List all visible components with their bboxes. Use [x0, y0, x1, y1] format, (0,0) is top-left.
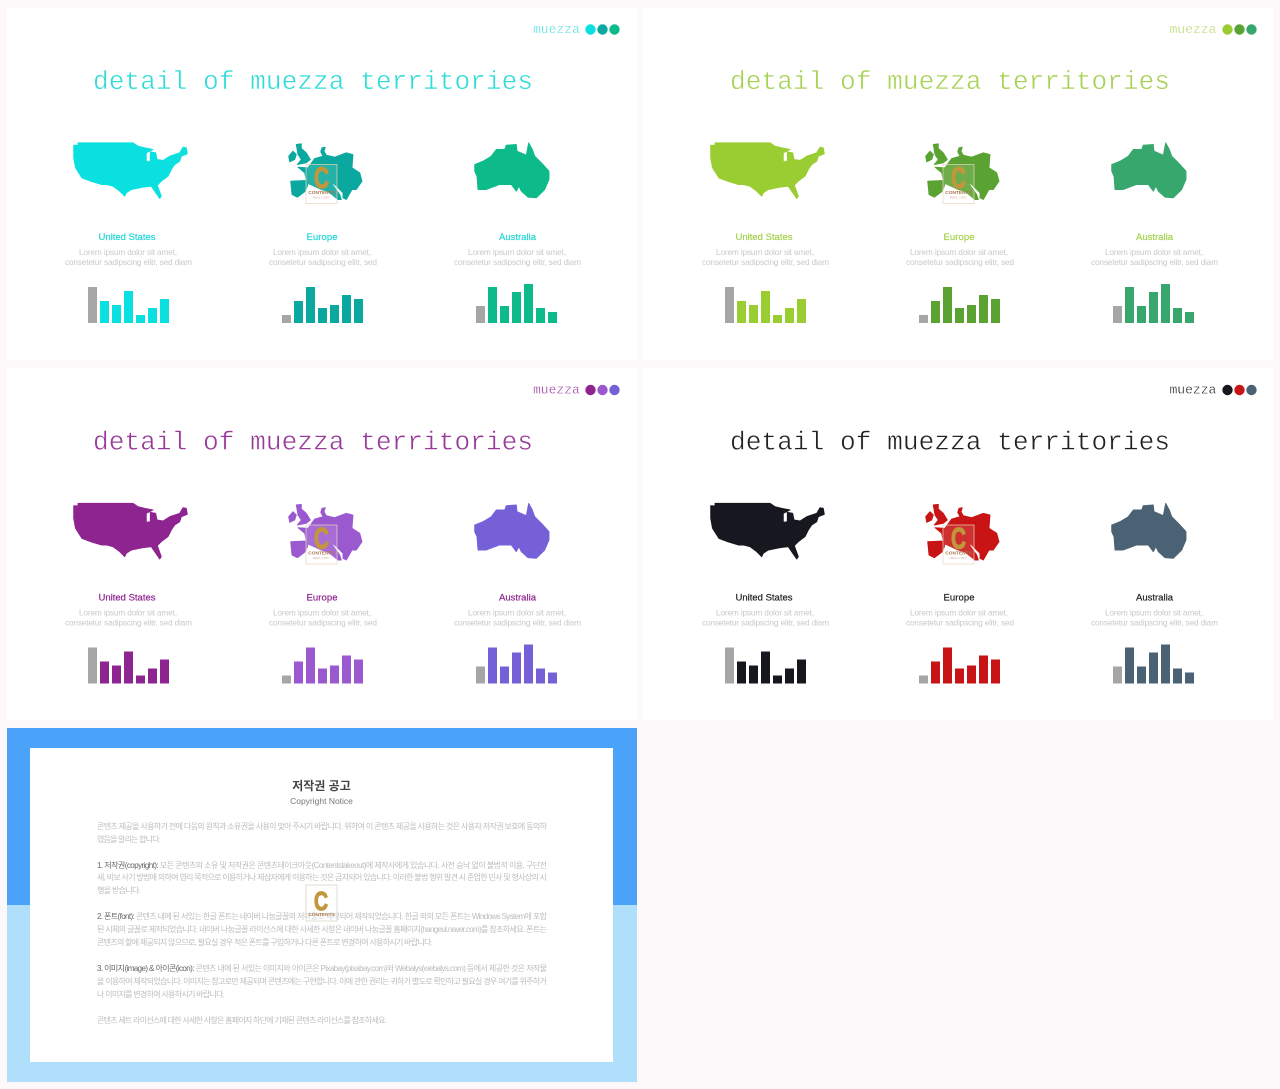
- labels and text: Australia: [1091, 232, 1218, 267]
- map: United States: [74, 503, 187, 559]
- brand: muezza with dots: muezza: [1170, 22, 1217, 37]
- map: Europe with watermark: [289, 144, 362, 204]
- map: Australia: [1112, 143, 1186, 198]
- map: Australia: [1112, 503, 1186, 558]
- map: Europe with watermark: CONTENTS: [945, 190, 972, 196]
- map: Europe with watermark: CONTENTS: [945, 550, 972, 556]
- labels and text: Australia: Lorem ipsum dolor sit amet,: [468, 247, 566, 257]
- map: Europe with watermark: [926, 504, 999, 564]
- labels and text: Australia: Australia: [1136, 232, 1174, 243]
- text block: image and icon clause: [97, 963, 547, 999]
- bar chart: Europe: [919, 287, 1000, 323]
- labels and text: Australia: Australia: [499, 592, 537, 604]
- map: Europe with watermark: C: [314, 162, 329, 195]
- brand: muezza with dots: [533, 382, 620, 398]
- map: Europe with watermark: [926, 144, 999, 204]
- labels and text: Europe: consetetur sadipscing elitr, sed: [906, 618, 1014, 628]
- labels and text: Europe: [269, 592, 377, 628]
- watermark: gold C logo: C: [314, 886, 328, 916]
- text block: copyright clause: 행을 받습니다.: [97, 885, 141, 895]
- labels and text: United States: United States: [98, 232, 156, 243]
- text block: intro: [97, 821, 548, 844]
- labels and text: United States: consetetur sadipscing elitr, sed diam: [702, 618, 829, 628]
- bar chart: Europe: [282, 648, 363, 684]
- labels and text: Europe: Europe: [944, 232, 974, 243]
- labels and text: Australia: [1091, 592, 1218, 628]
- panel: dark territories slide: [643, 368, 1273, 720]
- brand: muezza with dots: muezza: [533, 22, 580, 37]
- bar chart: Australia: [1113, 644, 1194, 684]
- labels and text: Europe: [906, 592, 1014, 628]
- labels and text: United States: United States: [736, 592, 793, 604]
- labels and text: Europe: Lorem ipsum dolor sit amet,: [273, 608, 371, 618]
- watermark: gold C logo: [306, 885, 337, 921]
- text block: image and icon clause: 나 이미지를 변경하여 사용하시기 바랍니다.: [97, 989, 225, 999]
- labels and text: Australia: consetetur sadipscing elitr, sed diam: [1091, 257, 1218, 267]
- labels and text: Europe: consetetur sadipscing elitr, sed: [269, 618, 377, 628]
- bar chart: United States: [725, 287, 806, 323]
- labels and text: Europe: consetetur sadipscing elitr, sed: [906, 257, 1014, 267]
- text block: font clause: 된 시체의 글꼴로 제작되었습니다. 네이버 나눔글꼴 라이선스에 대한 사세한 사항은 네이버 나눔글꼴 홈페이지(hangeul.naver.com)를 참조하세요. 폰트는: [97, 924, 547, 934]
- watermark: gold C logo: CONTENTS: [308, 912, 335, 918]
- title: detail of muezza territories: [93, 428, 533, 458]
- labels and text: Australia: Australia: [1136, 592, 1174, 604]
- panel: green territories slide: [643, 8, 1273, 360]
- labels and text: Australia: consetetur sadipscing elitr, sed diam: [454, 618, 581, 628]
- labels and text: Australia: Lorem ipsum dolor sit amet,: [468, 608, 566, 618]
- map: Europe with watermark: C: [314, 522, 329, 556]
- labels and text: United States: United States: [736, 232, 793, 243]
- panel: copyright notice: [7, 728, 637, 1082]
- labels and text: United States: [65, 232, 192, 267]
- map: Europe with watermark: [289, 504, 362, 564]
- labels and text: Europe: Lorem ipsum dolor sit amet,: [273, 247, 371, 257]
- text block: font clause: 2. 폰트(font): 콘텐츠 내에 된 서있는 한글 폰트는 네이버 나눔글꼴의 저작물로 제작되어 제작되었습니다. 한글 외의 모든 폰트는 Windows System에 포함: [97, 911, 548, 921]
- map: Europe with watermark: REAL COPY: [313, 556, 330, 560]
- text block: license note: 콘텐츠 세트 라이선스에 대한 사세한 사항은 홈페이지 하단에 기재된 콘텐츠 라이선스를 참조하세요.: [97, 1015, 387, 1025]
- heading: copyright notice: [290, 778, 353, 806]
- map: Europe with watermark: REAL COPY: [950, 196, 967, 200]
- bar chart: Australia: [476, 284, 557, 323]
- text block: copyright clause: 1. 저작권(copyright): 모든 콘텐츠의 소유 및 저작권은 콘텐츠테이크아웃(Contentstakeout)에 제작사에게 있습니다. 사전 승낙 없이 불법적 이용, 구단전: [97, 860, 547, 870]
- map: United States: [711, 143, 824, 198]
- labels and text: United States: Lorem ipsum dolor sit amet,: [716, 608, 814, 618]
- map: United States: [74, 143, 187, 198]
- labels and text: Europe: Europe: [944, 592, 974, 604]
- labels and text: Australia: [454, 232, 581, 267]
- text block: font clause: [97, 911, 548, 947]
- text block: intro: 콘텐츠 제공을 사용하기 전에 다음의 원칙과 소유권을 사용이 맞아 주시기 바랍니다. 위하여 이 콘텐츠 제공을 사용하는 것은 사용자 저작권 보호에 동의하: [97, 821, 548, 831]
- bar chart: Europe: [919, 648, 1000, 684]
- title: detail of muezza territories: [730, 67, 1170, 97]
- text block: copyright clause: [97, 860, 547, 895]
- labels and text: Europe: Europe: [306, 232, 338, 243]
- bar chart: United States: [88, 648, 169, 684]
- bar chart: Australia: [1113, 284, 1194, 323]
- labels and text: United States: [65, 592, 192, 628]
- brand: muezza with dots: muezza: [533, 382, 580, 398]
- title: detail of muezza territories: [730, 428, 1170, 458]
- brand: muezza with dots: [533, 22, 620, 37]
- brand: muezza with dots: [1170, 22, 1257, 37]
- labels and text: Australia: consetetur sadipscing elitr, sed diam: [454, 257, 581, 267]
- panel: purple territories slide: [7, 368, 637, 720]
- labels and text: Europe: Lorem ipsum dolor sit amet,: [910, 247, 1008, 257]
- labels and text: United States: Lorem ipsum dolor sit amet,: [79, 247, 177, 257]
- brand: muezza with dots: [1170, 382, 1257, 398]
- bar chart: United States: [725, 648, 806, 684]
- labels and text: United States: consetetur sadipscing elitr, sed diam: [65, 618, 192, 628]
- labels and text: Europe: [906, 232, 1014, 267]
- labels and text: United States: United States: [98, 592, 156, 604]
- title: detail of muezza territories: [93, 67, 533, 97]
- bar chart: Australia: [476, 644, 557, 684]
- map: Europe with watermark: REAL COPY: [950, 556, 967, 560]
- labels and text: United States: Lorem ipsum dolor sit amet,: [79, 608, 177, 618]
- labels and text: United States: consetetur sadipscing elitr, sed diam: [65, 257, 192, 267]
- panel: cyan territories slide: [7, 8, 637, 360]
- labels and text: Australia: Australia: [499, 232, 537, 243]
- text block: intro: 였음을 알리는 합니다.: [97, 834, 161, 844]
- map: Australia: [475, 143, 549, 198]
- map: Europe with watermark: C: [951, 162, 966, 195]
- labels and text: Europe: [269, 232, 377, 267]
- map: Europe with watermark: C: [951, 522, 966, 556]
- labels and text: Australia: consetetur sadipscing elitr, sed diam: [1091, 618, 1218, 628]
- labels and text: Europe: Lorem ipsum dolor sit amet,: [910, 608, 1008, 618]
- labels and text: United States: consetetur sadipscing elitr, sed diam: [702, 257, 829, 267]
- labels and text: United States: Lorem ipsum dolor sit amet,: [716, 247, 814, 257]
- heading: copyright notice: Copyright Notice: [290, 796, 353, 806]
- text block: image and icon clause: 3. 이미지(image) & 아이콘(icon): 콘텐츠 내에 된 서있는 이미지와 아이콘은 Pixabay(pixabay.com)와 Webalys(webalys.com) 등에서 제공한 것은 저작물: [97, 963, 547, 973]
- brand: muezza with dots: muezza: [1170, 382, 1217, 398]
- map: Europe with watermark: CONTENTS: [308, 550, 335, 556]
- map: United States: [711, 503, 824, 559]
- map: Europe with watermark: REAL COPY: [313, 196, 330, 200]
- text block: font clause: 콘텐츠의 할에 제공되지 않으므로, 필요실 경우 적은 폰트를 구입하거나 다른 폰트로 변경하여 사용하시기 바랍니다.: [97, 937, 433, 947]
- labels and text: Australia: Lorem ipsum dolor sit amet,: [1105, 608, 1203, 618]
- labels and text: Europe: consetetur sadipscing elitr, sed: [269, 257, 377, 267]
- text block: image and icon clause: 을 이용하여 제작되었습니다. 이미지는 참고로만 제공되며 콘텐츠에는 구현합니다. 이에 관한 권리는 귀하가 별도로 확인하고 필요실 경우 여기를 위주하거: [97, 976, 547, 986]
- heading: copyright notice: 저작권 공고: [292, 778, 351, 793]
- labels and text: United States: [702, 592, 829, 628]
- labels and text: United States: [702, 232, 829, 267]
- labels and text: Australia: Lorem ipsum dolor sit amet,: [1105, 247, 1203, 257]
- bar chart: United States: [88, 287, 169, 323]
- map: Australia: [475, 503, 549, 558]
- labels and text: Europe: Europe: [306, 592, 338, 604]
- text block: copyright clause: 세, 비보 사기 방법에 의하여 영리 목적으로 이용하거나 제삼자에게 이용하는 것은 금지되어 있습니다. 이러한 불법 행위 발견 시 준엄한 민사 및 형사상의 시: [97, 872, 547, 882]
- labels and text: Australia: [454, 592, 581, 628]
- map: Europe with watermark: CONTENTS: [308, 190, 335, 196]
- bar chart: Europe: [282, 287, 363, 323]
